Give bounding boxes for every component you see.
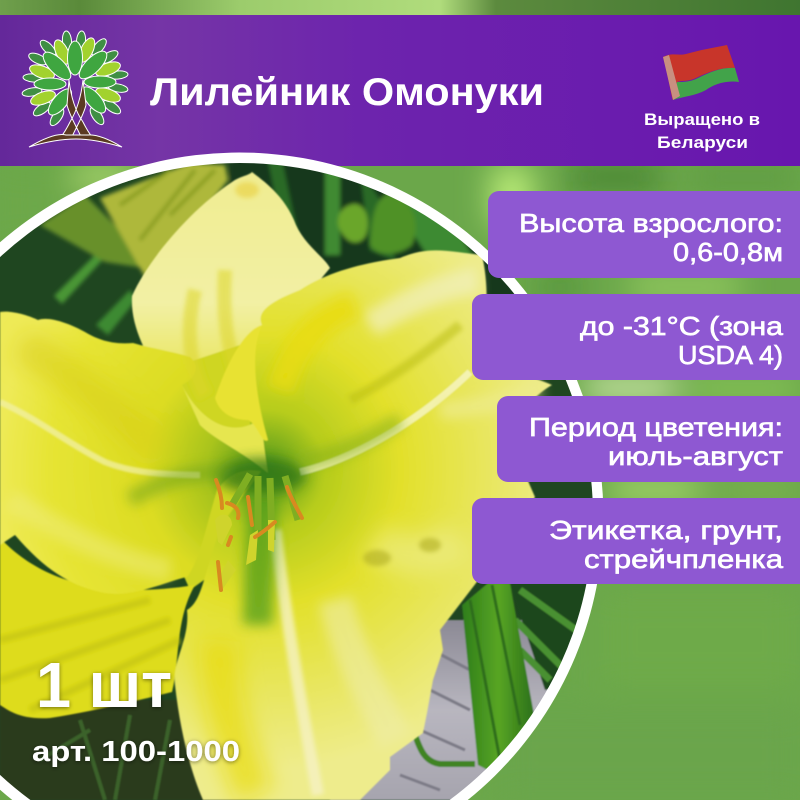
lower background: dark grass, wood and leaves (0, 583, 600, 800)
quantity label: 1 шт (36, 649, 172, 721)
panel: height (488, 191, 800, 278)
right petal shading (300, 372, 470, 472)
panel: blooming period: июль-август (608, 441, 783, 471)
panel: package contents: стрейчпленка (584, 544, 784, 574)
flower throat (130, 420, 400, 590)
panel: frost hardiness: до -31°C (зона (580, 311, 784, 341)
foliage behind the flower (40, 155, 520, 335)
title: Лилейник Омонуки (150, 71, 544, 114)
caption: grown in Belarus: Выращено в (644, 111, 760, 129)
caption: grown in Belarus: Беларуси (657, 134, 748, 152)
light leaves (28, 36, 122, 108)
article number: арт. 100-1000 (32, 736, 240, 768)
left petal (0, 312, 270, 594)
top petal (130, 171, 331, 361)
panel: blooming period: Период цветения: (529, 412, 783, 442)
bottom petal shading (275, 530, 318, 795)
bottom and lower right petal (175, 440, 535, 800)
right petal (250, 250, 552, 483)
outer dark leaves (21, 31, 129, 128)
trunk and ground (59, 80, 94, 139)
flower base filling the centre (150, 335, 300, 590)
panel: frost hardiness (472, 294, 800, 380)
circular flower photo (0, 150, 603, 800)
logo: tree (21, 31, 129, 147)
panel: package contents: Этикетка, грунт, (549, 515, 783, 545)
central fold (182, 385, 268, 473)
stamens (232, 474, 298, 540)
panel: height: 0,6-0,8м (673, 237, 783, 267)
panel: package contents (472, 498, 800, 584)
pale petal streak (0, 402, 200, 475)
icon: Belarus flag (663, 45, 739, 100)
caption: grown in Belarus (644, 111, 760, 152)
top petal veins (180, 268, 238, 361)
panel: frost hardiness: USDA 4) (678, 340, 783, 370)
large leaves (34, 41, 116, 119)
header band (0, 15, 800, 166)
flower petals (0, 172, 552, 800)
white circle ring (0, 152, 603, 800)
panel: height: Высота взрослого: (519, 208, 783, 238)
panel: blooming period (497, 396, 800, 482)
lower left petal (0, 538, 195, 718)
